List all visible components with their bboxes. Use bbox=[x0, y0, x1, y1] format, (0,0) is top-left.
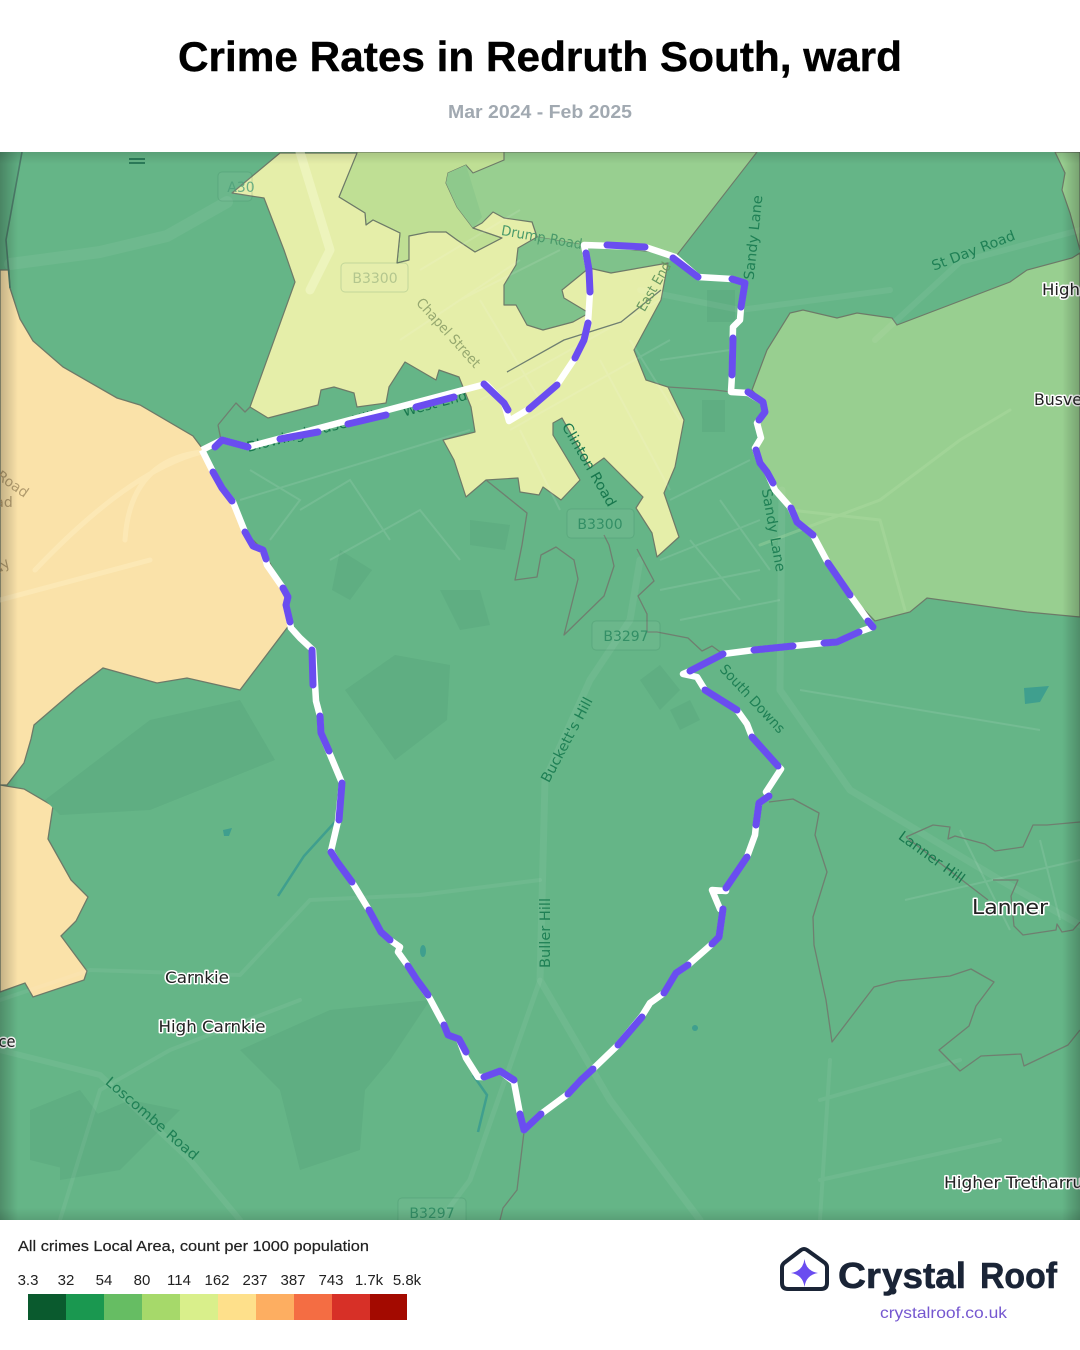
legend scale values: 5.8k bbox=[393, 1272, 422, 1289]
road label: Clinton Road: Clinton Road bbox=[558, 420, 619, 510]
legend bbox=[18, 1238, 422, 1320]
road label: St Day Road: St Day Road bbox=[930, 228, 1018, 275]
logo wordmark: Cr bbox=[838, 1255, 881, 1296]
legend scale values bbox=[18, 1272, 422, 1289]
map: streams and ponds bbox=[223, 686, 1049, 1132]
subtitle: date range: Mar 2024 - Feb 2025 bbox=[448, 101, 632, 122]
map panel bbox=[0, 152, 1080, 1227]
road label: Drump Road: Drump Road bbox=[500, 223, 583, 253]
logo wordmark bbox=[838, 1255, 1058, 1296]
logo wordmark: ystal bbox=[882, 1255, 966, 1296]
legend heading: All crimes Local Area, count per 1000 population bbox=[18, 1238, 369, 1255]
road label: Loscombe Road: Loscombe Road bbox=[102, 1074, 201, 1164]
place label: High Carnkie: High Carnkie bbox=[158, 1017, 266, 1036]
road shield: B3300 north bbox=[341, 263, 408, 292]
legend scale values: 80 bbox=[134, 1272, 150, 1289]
choropleth: pale green area north-west bbox=[339, 152, 504, 263]
choropleth: light green area east bbox=[752, 253, 1080, 621]
road label: Chapel Street: Chapel Street bbox=[413, 295, 484, 372]
icon: house with star bbox=[782, 1249, 827, 1289]
road shield: B3300 south: B3300 bbox=[577, 517, 623, 533]
choropleth: mid green block bbox=[446, 165, 482, 228]
map: town streets bbox=[240, 210, 1080, 930]
legend scale values: 32 bbox=[58, 1272, 74, 1289]
website url: crystalroof.co.uk bbox=[880, 1305, 1008, 1322]
road label: Blowinghouse Hill: Blowinghouse Hill bbox=[245, 408, 377, 456]
road label: Sandy Lane south: Sandy Lane bbox=[758, 488, 788, 573]
road shield: B3297 south bbox=[398, 1198, 466, 1220]
legend scale values: 743 bbox=[318, 1272, 344, 1289]
road label: South Downs: South Downs bbox=[716, 662, 788, 737]
legend scale values: 1.7k bbox=[355, 1272, 384, 1289]
legend scale values: 54 bbox=[96, 1272, 112, 1289]
place label: Carnkie: Carnkie bbox=[165, 968, 229, 987]
choropleth: light green corner north-east bbox=[1055, 152, 1080, 250]
legend scale values: 114 bbox=[167, 1272, 191, 1289]
choropleth: mid green enclave bbox=[504, 237, 677, 330]
road shield: B3297 centre: B3297 bbox=[603, 629, 649, 645]
logo: Crystal Roof bbox=[782, 1249, 1058, 1322]
map edge shading bbox=[0, 152, 1080, 1220]
logo y-tail dot bbox=[890, 1288, 896, 1294]
legend scale values: 237 bbox=[242, 1272, 268, 1289]
map: darker field patches bbox=[46, 801, 54, 808]
road shield: B3300 north: B3300 bbox=[352, 271, 398, 287]
icon: railway station bbox=[129, 159, 145, 163]
choropleth: orange area south-west bbox=[0, 785, 88, 997]
legend scale values: 3.3 bbox=[18, 1272, 38, 1289]
choropleth: light green area north bbox=[440, 152, 757, 255]
road label: West End: West End bbox=[401, 388, 469, 420]
road label: Buller Hill: Buller Hill bbox=[538, 898, 554, 968]
road label: Lanner Hill: Lanner Hill bbox=[895, 828, 968, 887]
road shield: B3297 south: B3297 bbox=[409, 1206, 455, 1222]
road shield: B3300 south bbox=[567, 509, 634, 538]
map: far left darker strip bbox=[2, 152, 21, 269]
legend scale values: 162 bbox=[204, 1272, 230, 1289]
ward boundary: white line with purple dashes bbox=[202, 245, 873, 1130]
road shield: B3297 centre bbox=[592, 621, 660, 650]
legend scale values: 387 bbox=[280, 1272, 306, 1289]
logo wordmark: Roof bbox=[980, 1255, 1058, 1296]
road label: Buckett's Hill: Buckett's Hill bbox=[538, 695, 597, 785]
title: Crime Rates in Redruth South, ward bbox=[178, 33, 902, 80]
road label: East End: East End bbox=[634, 260, 675, 314]
legend colour bar bbox=[28, 1294, 407, 1320]
place label: High: High bbox=[1042, 280, 1080, 299]
road shield: A30: A30 bbox=[227, 180, 255, 196]
map: other ward boundaries bbox=[6, 152, 1080, 1220]
place label: Lanner: Lanner bbox=[972, 895, 1049, 919]
road shield: A30 bbox=[218, 172, 255, 201]
map: main roads bbox=[0, 152, 1080, 1220]
road label: Sandy Lane north: Sandy Lane bbox=[742, 194, 766, 281]
choropleth: yellow town centre bbox=[232, 153, 684, 557]
choropleth: orange area west bbox=[0, 270, 290, 785]
